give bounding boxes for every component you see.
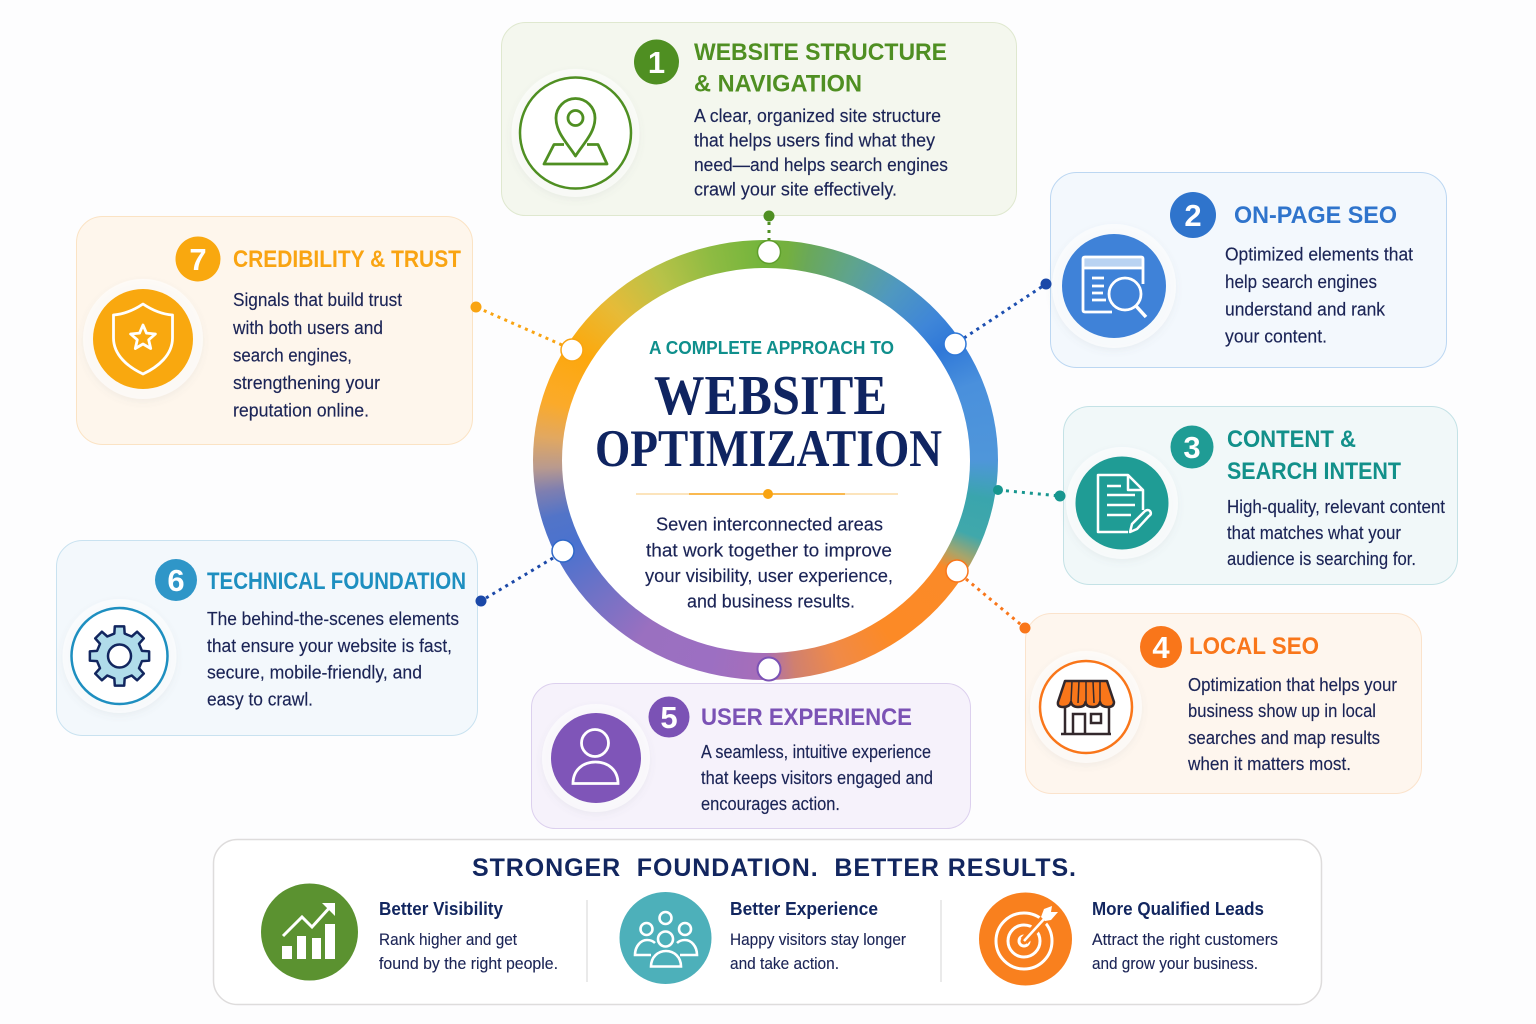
main title: OPTIMIZATION: [595, 420, 942, 478]
benefit text: Rank higher and get: [379, 930, 517, 949]
body 3: audience is searching for.: [1227, 549, 1416, 569]
body 2: understand and rank: [1225, 300, 1386, 320]
connector 6: [476, 540, 574, 606]
heading 5: USER EXPERIENCE: [701, 704, 912, 731]
number badge 5: [648, 696, 690, 738]
body 4: searches and map results: [1188, 728, 1380, 748]
body 6: easy to crawl.: [207, 690, 313, 710]
body 4: when it matters most.: [1187, 754, 1351, 774]
body 7: search engines,: [233, 346, 352, 366]
icon: target with arrow: [979, 892, 1072, 986]
description: your visibility, user experience,: [645, 566, 893, 586]
connector 4: [946, 560, 1030, 634]
icon: browser with magnifier: [1052, 224, 1176, 348]
panel: stronger foundation, better results: [214, 840, 1322, 1004]
body 4: Optimization that helps your: [1188, 675, 1397, 695]
benefit text: Better Experience: [730, 899, 878, 919]
body 7: strengthening your: [233, 373, 380, 393]
number badge 2: 2: [1184, 198, 1202, 233]
heading 1: [694, 39, 947, 98]
benefit text: and grow your business.: [1092, 954, 1258, 973]
benefit: better experience: [620, 892, 906, 984]
description: [645, 514, 893, 612]
number badge 6: [155, 559, 197, 601]
benefit text: [1092, 899, 1278, 973]
body 3: that matches what your: [1227, 523, 1401, 543]
body 7: Signals that build trust: [233, 290, 402, 310]
connector 2: [944, 278, 1052, 355]
body 5: that keeps visitors engaged and: [701, 768, 933, 788]
benefit text: [730, 899, 906, 973]
description: that work together to improve: [646, 540, 892, 560]
number badge 7: [176, 236, 220, 282]
body 4: [1187, 675, 1397, 774]
heading 6: TECHNICAL FOUNDATION: [207, 568, 466, 595]
benefit text: Happy visitors stay longer: [730, 930, 906, 949]
panel 5: user experience: [532, 684, 970, 828]
main title: [595, 365, 942, 478]
heading 4: LOCAL SEO: [1189, 633, 1319, 660]
panel 7: credibility and trust: [76, 216, 472, 444]
body 3: [1227, 497, 1445, 569]
heading 3: SEARCH INTENT: [1227, 458, 1401, 485]
number badge 2: [1170, 192, 1216, 238]
number badge 1: 1: [648, 45, 665, 80]
body 7: [232, 290, 402, 420]
number badge 4: [1140, 626, 1182, 668]
icon: user: [542, 704, 650, 812]
description: and business results.: [687, 592, 855, 612]
body 3: High-quality, relevant content: [1227, 497, 1445, 517]
benefit text: and take action.: [730, 954, 839, 973]
body 2: Optimized elements that: [1225, 244, 1413, 264]
heading 1: WEBSITE STRUCTURE: [694, 39, 947, 66]
icon: shield with star: [83, 279, 203, 399]
number badge 7: 7: [189, 242, 207, 277]
eyebrow: A COMPLETE APPROACH TO: [649, 337, 894, 358]
connector 5 node: [758, 658, 780, 680]
divider: [636, 489, 898, 499]
body 2: help search engines: [1225, 272, 1377, 292]
body 6: The behind-the-scenes elements: [207, 609, 459, 629]
body 1: that helps users find what they: [694, 130, 935, 150]
body 2: [1225, 244, 1413, 346]
connector 3: [993, 485, 1066, 502]
icon: gear: [62, 599, 176, 713]
heading 3: [1227, 426, 1401, 485]
panel 6: technical foundation: [56, 540, 478, 736]
body 5: encourages action.: [701, 794, 840, 814]
benefit text: [379, 899, 558, 973]
heading 7: CREDIBILITY & TRUST: [233, 246, 461, 273]
main title: WEBSITE: [654, 365, 887, 427]
icon: storefront: [1030, 651, 1142, 763]
panel 2: on-page seo: [1050, 172, 1446, 368]
description: Seven interconnected areas: [656, 514, 883, 534]
benefit text: found by the right people.: [379, 954, 558, 973]
benefit text: Attract the right customers: [1092, 930, 1278, 949]
benefit text: Better Visibility: [379, 899, 503, 919]
icon: growth chart: [261, 884, 358, 980]
panel 4: local seo: [1026, 614, 1422, 794]
connector 7: [470, 302, 583, 361]
body 1: need—and helps search engines: [694, 155, 948, 175]
icon: document with pencil: [1066, 447, 1178, 559]
panel 1: website structure and navigation: [502, 22, 1016, 216]
banner heading: STRONGER FOUNDATION. BETTER RESULTS.: [472, 854, 1076, 882]
center text block: [595, 337, 942, 612]
icon: group of people: [620, 892, 712, 984]
body 1: [694, 106, 948, 200]
body 1: A clear, organized site structure: [694, 106, 941, 126]
number badge 1: [634, 40, 679, 84]
body 4: business show up in local: [1188, 701, 1376, 721]
number badge 4: 4: [1152, 630, 1170, 665]
body 2: your content.: [1225, 326, 1327, 346]
icon: map pin: [512, 69, 640, 197]
body 7: reputation online.: [233, 400, 369, 420]
heading 1: & NAVIGATION: [694, 70, 862, 98]
heading 3: CONTENT &: [1227, 426, 1356, 453]
body 5: A seamless, intuitive experience: [701, 742, 931, 762]
body 5: [701, 742, 933, 814]
body 1: crawl your site effectively.: [694, 180, 897, 200]
central gradient ring: [533, 240, 998, 680]
body 6: that ensure your website is fast,: [207, 636, 452, 656]
number badge 5: 5: [660, 700, 678, 735]
number badge 3: 3: [1183, 430, 1201, 465]
connector 1: [758, 210, 780, 264]
benefit: more qualified leads: [979, 892, 1278, 986]
benefit text: More Qualified Leads: [1092, 899, 1264, 919]
body 6: secure, mobile-friendly, and: [207, 662, 422, 682]
heading 2: ON-PAGE SEO: [1234, 202, 1397, 229]
number badge 6: 6: [167, 563, 185, 598]
panel 3: content and search intent: [1064, 406, 1458, 584]
body 6: [207, 609, 459, 710]
body 7: with both users and: [232, 318, 383, 338]
number badge 3: [1170, 426, 1214, 468]
benefit: better visibility: [261, 884, 558, 980]
